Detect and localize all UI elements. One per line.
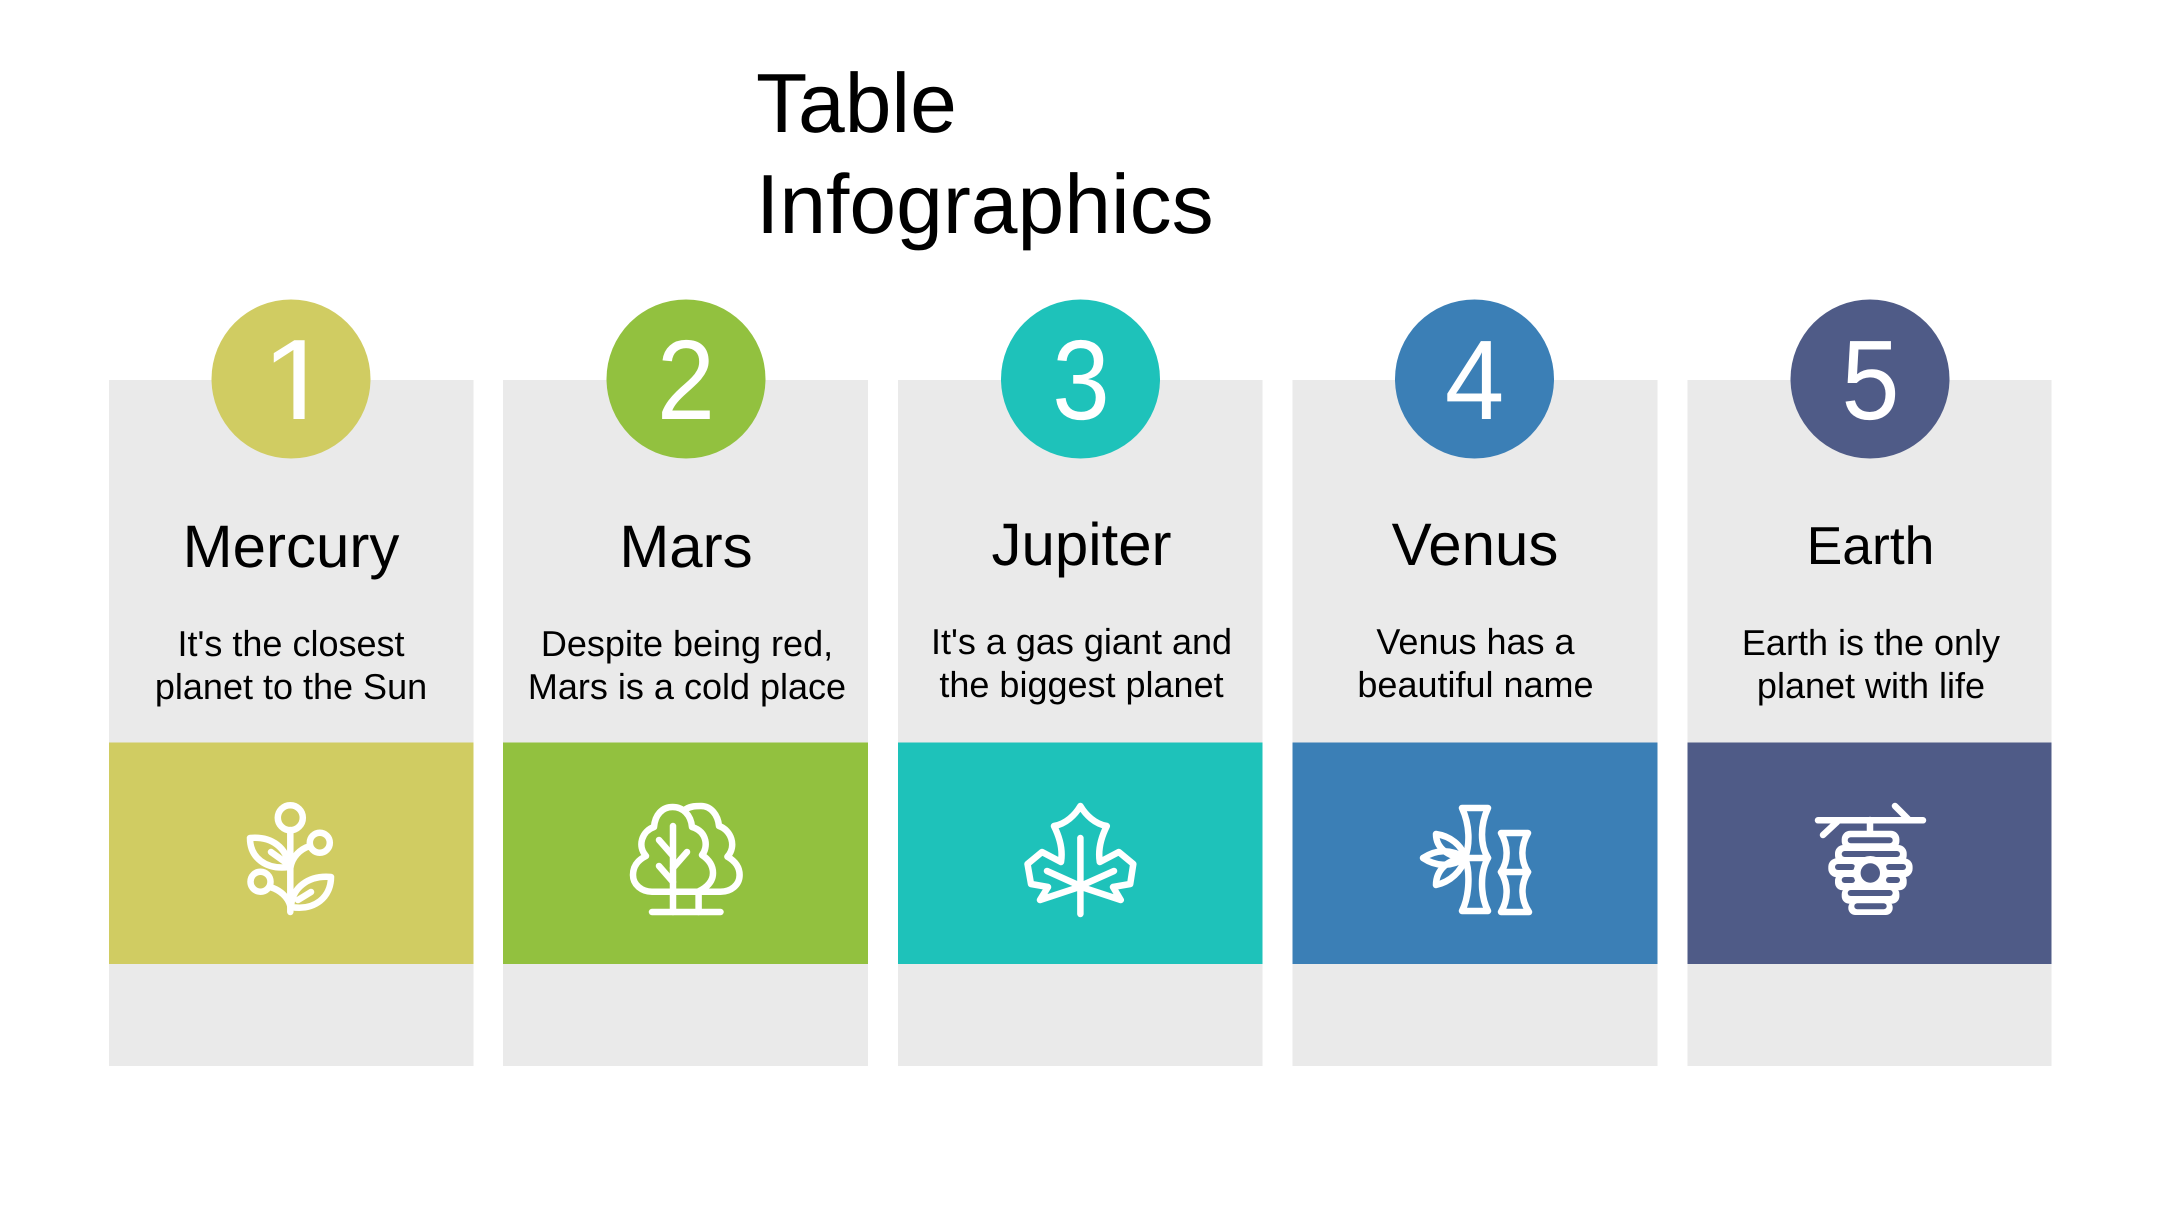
description: planet to the Sun [155, 666, 427, 707]
description: It's a gas giant and [931, 621, 1232, 662]
card background [503, 380, 868, 1066]
number badge 5: 5 [1841, 317, 1900, 444]
colour band [1688, 742, 2052, 964]
description: the biggest planet [939, 664, 1224, 705]
title: Table [756, 56, 957, 150]
heading: Mars [619, 513, 753, 580]
colour band [503, 742, 868, 964]
number badge 5 [1790, 300, 1950, 458]
panel: Earth [1688, 300, 2052, 1066]
card background [109, 380, 474, 1066]
number badge 2: 2 [657, 317, 715, 444]
heading: Jupiter [991, 511, 1172, 578]
number badge 2 [606, 300, 766, 458]
panel: Mercury [109, 300, 474, 1066]
card background [1688, 380, 2052, 1066]
number badge 4: 4 [1445, 317, 1504, 444]
icon: beehive [1818, 806, 1923, 915]
number badge 3: 3 [1052, 317, 1110, 444]
description: It's the closest [178, 623, 404, 664]
heading: Venus [1392, 511, 1558, 578]
description: beautiful name [1357, 664, 1594, 705]
heading: Mercury [183, 513, 399, 580]
colour band [109, 742, 474, 964]
number badge 3 [1001, 300, 1160, 458]
colour band [898, 742, 1262, 964]
description: Earth is the only [1742, 622, 2000, 663]
card background [1292, 380, 1658, 1066]
description: Venus has a [1376, 621, 1576, 662]
panel: Mars [503, 300, 868, 1066]
description: planet with life [1757, 665, 1985, 706]
colour band [1292, 742, 1658, 964]
description: Mars is a cold place [528, 666, 846, 707]
number badge 1 [212, 300, 370, 458]
panel: Venus [1292, 300, 1658, 1066]
number badge 1: 1 [262, 316, 332, 444]
card background [898, 380, 1262, 1066]
icon: bamboo [1423, 808, 1529, 912]
icon: trees [633, 806, 740, 912]
panel: Jupiter [898, 300, 1262, 1066]
icon: maple leaf [1028, 806, 1133, 914]
number badge 4 [1395, 300, 1554, 458]
description: Despite being red, [541, 623, 833, 664]
title [756, 56, 1214, 251]
heading: Earth [1807, 517, 1934, 576]
icon: plant [250, 805, 331, 912]
title: Infographics [756, 157, 1214, 251]
